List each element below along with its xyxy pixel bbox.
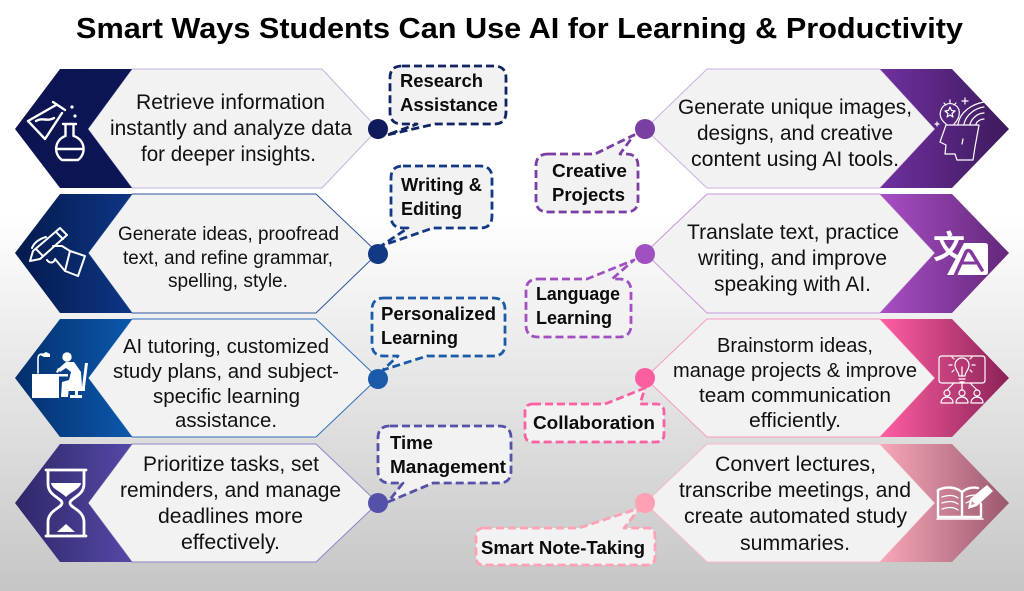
description: efficiently.	[749, 410, 841, 432]
description: team communication	[699, 385, 891, 407]
description	[678, 96, 912, 171]
description: Retrieve information	[136, 91, 325, 114]
panel: time management	[15, 444, 378, 562]
icon: flasks	[28, 102, 84, 160]
callout: time management	[378, 426, 511, 502]
icon: student at desk	[32, 352, 88, 398]
icon: open book with pen	[937, 485, 993, 519]
text panel	[645, 69, 935, 188]
description	[113, 336, 339, 432]
callout: smart note-taking	[476, 508, 655, 565]
description: deadlines more	[158, 505, 303, 528]
icon: translate: 文	[933, 229, 965, 265]
panel: collaboration	[645, 319, 1009, 437]
description: effectively.	[181, 531, 280, 554]
callout: collaboration	[525, 388, 664, 442]
callout: creative projects: Creative	[552, 161, 627, 181]
description: Brainstorm ideas,	[717, 335, 873, 357]
panel: smart note-taking	[645, 444, 1009, 562]
panel: personalized learning	[15, 319, 378, 437]
callout: writing and editing: Editing	[401, 199, 462, 219]
connector dot: creative projects	[635, 119, 655, 139]
icon band	[880, 194, 1009, 313]
description: AI tutoring, customized	[123, 336, 329, 358]
description: writing, and improve	[697, 247, 887, 270]
connector dot: writing and editing	[368, 244, 388, 264]
description: summaries.	[740, 532, 850, 555]
description	[673, 335, 917, 432]
callout: time management: Time	[390, 433, 433, 453]
description: study plans, and subject-	[113, 361, 339, 383]
text panel	[88, 194, 378, 313]
description: spelling, style.	[168, 271, 288, 292]
callout: writing and editing: Writing &	[401, 175, 482, 195]
description: specific learning	[153, 386, 300, 408]
callout: personalized learning: Personalized	[381, 304, 496, 324]
callout: language learning: Language	[536, 284, 620, 304]
connector dot: language learning	[635, 244, 655, 264]
description: for deeper insights.	[141, 143, 316, 166]
description: designs, and creative	[697, 122, 893, 145]
icon: team with light bulb	[939, 356, 985, 403]
icon: hand writing with pen	[30, 228, 85, 276]
description: content using AI tools.	[691, 148, 899, 171]
callout: language learning	[526, 260, 634, 337]
icon band	[880, 444, 1009, 562]
callout: creative projects: Projects	[552, 185, 625, 205]
description: Generate ideas, proofread	[118, 224, 339, 245]
callout: writing and editing	[381, 166, 492, 246]
connector dot: time management	[368, 493, 388, 513]
icon band	[15, 194, 132, 313]
description: text, and refine grammar,	[123, 248, 333, 269]
description: manage projects & improve	[673, 360, 917, 382]
callout: smart note-taking: Smart Note-Taking	[481, 538, 645, 558]
callout: research assistance	[387, 66, 506, 135]
connector dot: personalized learning	[368, 369, 388, 389]
text panel	[88, 319, 378, 437]
panel: language learning	[645, 194, 1009, 313]
icon band	[15, 319, 132, 437]
icon: translate	[933, 229, 988, 276]
text panel	[645, 319, 935, 437]
title: Smart Ways Students Can Use AI for Learning & Productivity	[76, 13, 963, 45]
callout: language learning: Learning	[536, 308, 612, 328]
panel: creative projects	[645, 69, 1009, 188]
text panel	[88, 444, 378, 562]
description	[679, 453, 911, 555]
description: reminders, and manage	[120, 479, 341, 502]
description: Translate text, practice	[687, 221, 899, 244]
icon band	[880, 319, 1009, 437]
icon band	[15, 69, 132, 188]
description: Prioritize tasks, set	[143, 453, 319, 476]
connector dot: research assistance	[368, 119, 388, 139]
callout: creative projects	[536, 135, 638, 212]
icon: hourglass	[46, 470, 86, 536]
callout: research assistance: Assistance	[400, 95, 498, 115]
description: assistance.	[175, 410, 277, 432]
text panel	[645, 194, 935, 313]
description	[687, 221, 899, 296]
icon band	[880, 69, 1009, 188]
description	[110, 91, 352, 166]
callout: personalized learning	[372, 298, 505, 370]
callout: collaboration: Collaboration	[533, 413, 655, 433]
callout: research assistance: Research	[400, 71, 483, 91]
description	[118, 224, 339, 292]
connector dot: collaboration	[635, 368, 655, 388]
panel: writing and editing	[15, 194, 378, 313]
icon band	[15, 444, 132, 562]
description: transcribe meetings, and	[679, 479, 911, 502]
callout: time management: Management	[390, 457, 506, 477]
text panel	[645, 444, 935, 562]
icon: head with rainbow idea	[935, 98, 984, 160]
connector dot: smart note-taking	[635, 493, 655, 513]
description: Convert lectures,	[715, 453, 876, 476]
description: Generate unique images,	[678, 96, 912, 119]
description: speaking with AI.	[714, 273, 871, 296]
callout: personalized learning: Learning	[381, 328, 458, 348]
panel: research assistance	[15, 69, 378, 188]
description	[120, 453, 341, 554]
description: instantly and analyze data	[110, 117, 352, 140]
description: create automated study	[684, 505, 908, 528]
text panel	[88, 69, 378, 188]
